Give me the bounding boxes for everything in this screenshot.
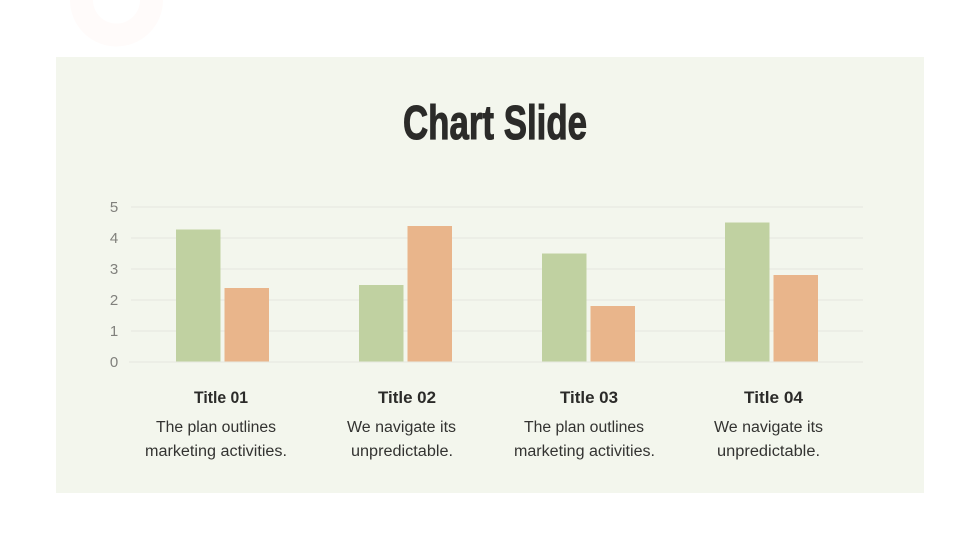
panel: chart background: [56, 57, 924, 493]
column 2 text: Title 02: [378, 389, 436, 407]
column 1 text: [145, 389, 287, 460]
column 1 text: marketing activities.: [145, 443, 287, 460]
y-axis labels: 0: [110, 354, 118, 371]
y-axis labels: 1: [110, 323, 118, 340]
decorative ring: [82, 0, 152, 35]
column 2 text: [347, 389, 456, 460]
y-axis labels: [110, 199, 118, 371]
bars: group 1: [176, 230, 269, 362]
y-axis labels: 2: [110, 292, 118, 309]
bar chart: [110, 199, 863, 371]
column 4 text: [714, 389, 823, 460]
title: Chart Slide: [403, 97, 587, 150]
column 3 text: marketing activities.: [514, 443, 655, 460]
column 1 text: The plan outlines: [156, 419, 276, 436]
bars: group 2: [359, 226, 452, 362]
y-axis labels: 3: [110, 261, 118, 278]
column 3 text: The plan outlines: [524, 419, 644, 436]
column 2 text: We navigate its: [347, 419, 456, 436]
column 1 text: Title 01: [194, 389, 248, 407]
column 4 text: We navigate its: [714, 419, 823, 436]
bars: group 3: [542, 254, 635, 362]
column 4 text: Title 04: [744, 389, 804, 407]
column 3 text: Title 03: [560, 389, 618, 407]
y-axis labels: 4: [110, 230, 118, 247]
column 2 text: unpredictable.: [351, 443, 453, 460]
y-axis labels: 5: [110, 199, 118, 216]
bars: group 4: [725, 222, 818, 362]
column 4 text: unpredictable.: [717, 443, 820, 460]
column 3 text: [514, 389, 655, 460]
